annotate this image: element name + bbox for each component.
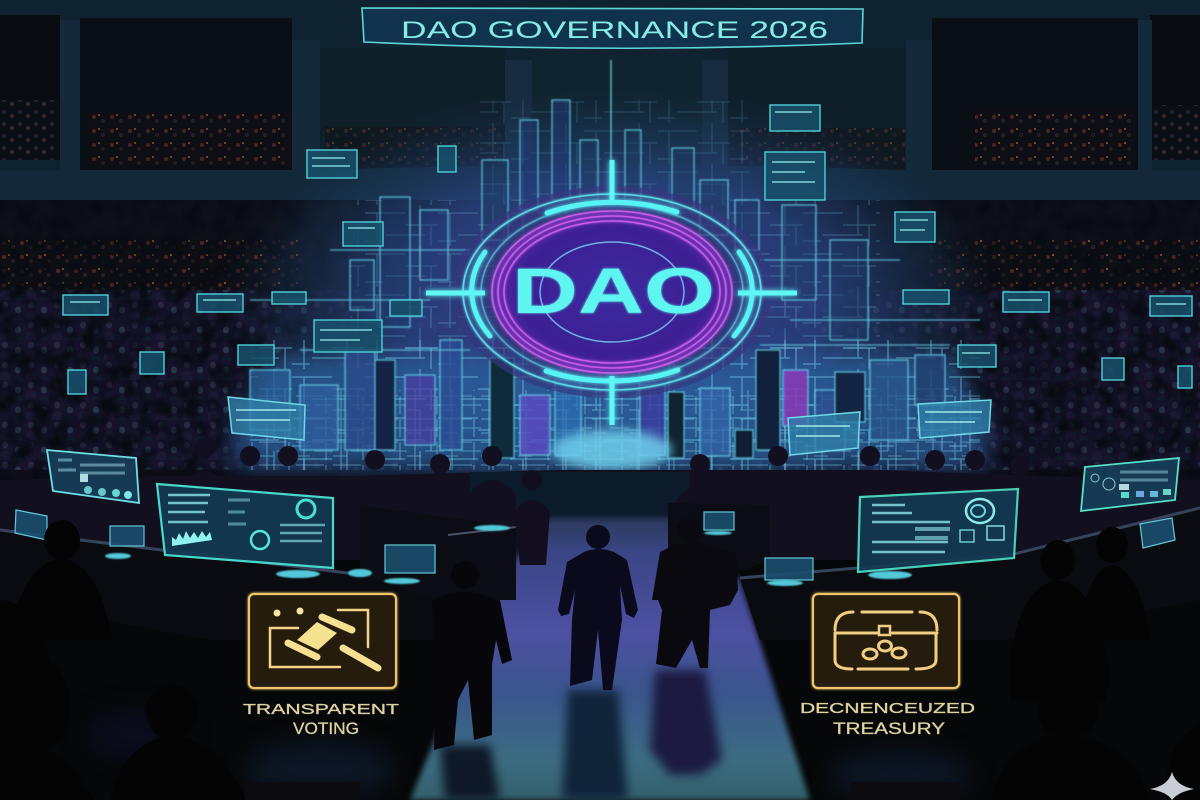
central figure 1 — [558, 525, 638, 690]
panel details: upper tier lines — [70, 112, 1186, 353]
left desks — [0, 505, 516, 640]
outer cyan rings — [463, 194, 761, 390]
left large panel — [157, 484, 333, 568]
crosshair ticks — [426, 160, 797, 425]
right desks — [668, 503, 1200, 640]
balcony architecture and upper crowd — [0, 0, 1200, 200]
title: DAO GOVERNANCE 2026 — [401, 17, 828, 44]
floating panels: upper and mid tier — [63, 105, 1192, 394]
DAO label: DAO — [512, 255, 715, 327]
thick arc segments — [472, 202, 752, 381]
label: decentralized treasury: TREASURY — [833, 720, 945, 738]
gavel icon — [270, 608, 378, 668]
magenta rings — [492, 211, 732, 373]
label: transparent voting: TRANSPARENT — [243, 702, 399, 718]
label: decentralized treasury — [800, 701, 975, 738]
central hologram glow — [222, 85, 1002, 515]
core disc — [494, 212, 730, 372]
left small panel — [47, 450, 139, 503]
hologram city buildings — [250, 60, 980, 458]
right large panel — [858, 489, 1018, 572]
ring backdrop — [452, 186, 772, 398]
left standing figure — [432, 561, 512, 750]
central figure 2 — [652, 518, 738, 668]
desk screen glows — [105, 525, 912, 586]
label: transparent voting — [243, 702, 399, 738]
label: transparent voting: VOTING — [293, 720, 359, 738]
standing background figure — [514, 470, 550, 565]
audience in front of the stage — [178, 438, 1046, 545]
lower hologram base glow — [235, 355, 985, 468]
middle tier crowd — [0, 200, 1200, 490]
side floor — [85, 710, 970, 800]
floor reflections — [440, 670, 722, 800]
hologram light column — [552, 430, 672, 470]
inner thin ring — [540, 242, 684, 342]
sparkle watermark — [1150, 772, 1194, 800]
icon card: decentralized treasury — [813, 594, 959, 688]
title banner — [362, 8, 863, 48]
treasure chest icon — [835, 612, 937, 669]
lower hall darkness — [0, 470, 1200, 800]
central floor — [410, 518, 810, 800]
right small panel — [1081, 458, 1179, 511]
small desk panels — [15, 510, 1175, 580]
DAO ring emblem — [426, 160, 797, 425]
label: decentralized treasury: DECNENCEUZED — [800, 701, 975, 717]
stage dashboard panels — [228, 397, 991, 455]
foreground silhouettes — [0, 520, 1200, 800]
hologram circuit lines — [250, 100, 980, 470]
icon card: transparent voting — [249, 594, 396, 688]
